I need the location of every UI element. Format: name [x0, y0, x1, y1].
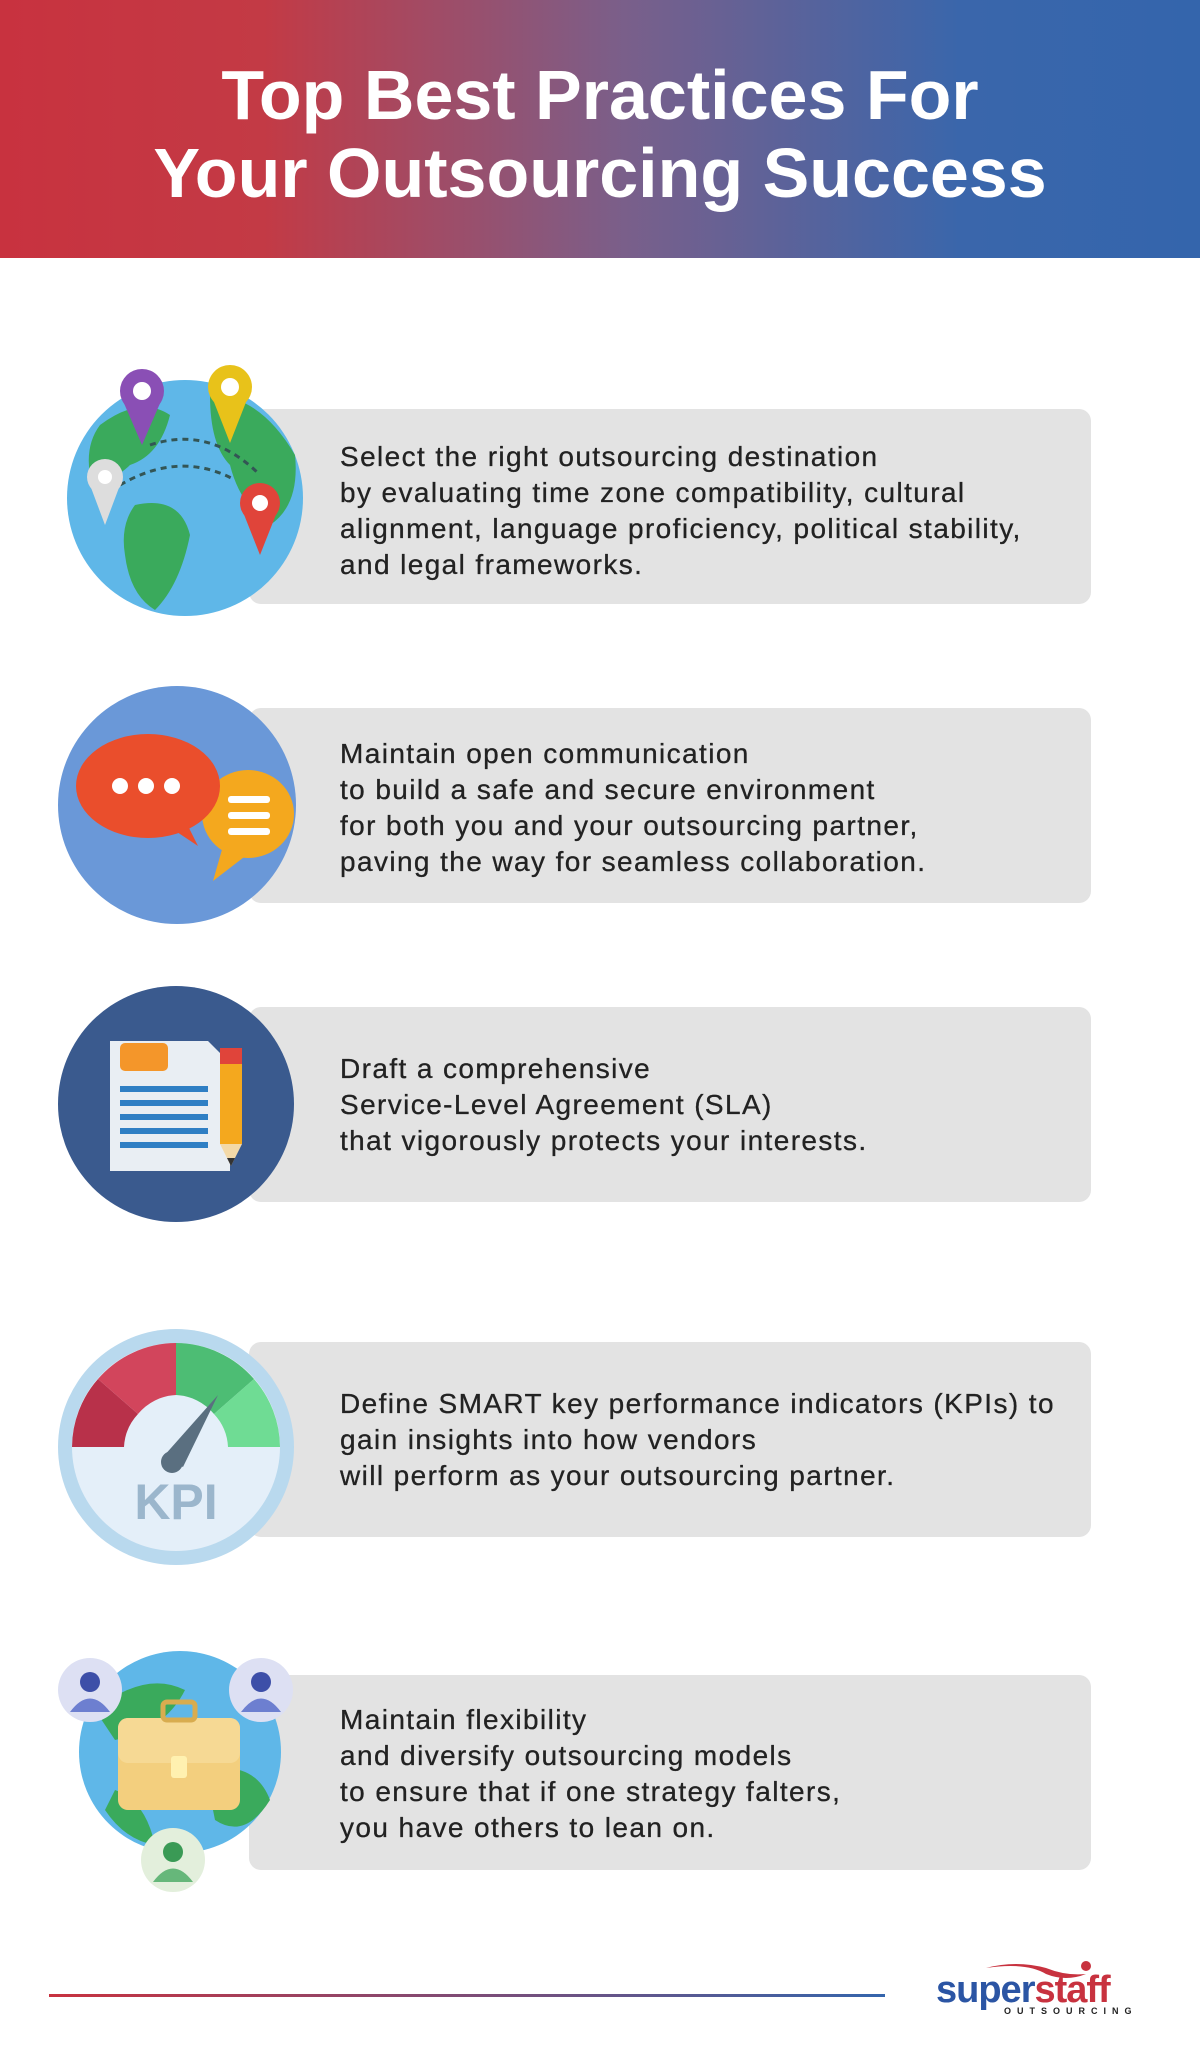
text 1: and legal frameworks. [340, 549, 643, 580]
text 2: Maintain open communication [340, 738, 750, 769]
icon: KPI gauge: KPI [134, 1474, 218, 1530]
logo: superstaff: OUTSOURCING [1004, 2006, 1138, 2016]
title [153, 56, 1047, 212]
text 2: paving the way for seamless collaboration. [340, 846, 926, 877]
text 4: will perform as your outsourcing partner. [340, 1460, 895, 1491]
text 1: by evaluating time zone compatibility, cultural [340, 477, 966, 508]
text 2: to build a safe and secure environment [340, 774, 876, 805]
text 5: to ensure that if one strategy falters, [340, 1776, 841, 1807]
text 1: Select the right outsourcing destination [340, 441, 879, 472]
icon: chat bubbles [58, 686, 296, 924]
text 4: Define SMART key performance indicators (KPIs) to [340, 1388, 1055, 1419]
logo: superstaff: superstaff [936, 1969, 1110, 2011]
panel 1 [249, 409, 1091, 604]
text 5: you have others to lean on. [340, 1812, 716, 1843]
icon: document and pencil [58, 986, 294, 1222]
text 2 [340, 738, 926, 878]
text 3: that vigorously protects your interests. [340, 1125, 868, 1156]
panel 3 [249, 1007, 1091, 1202]
text 5: and diversify outsourcing models [340, 1740, 793, 1771]
panel 5 [249, 1675, 1091, 1870]
icon: globe with briefcase and people [58, 1651, 293, 1892]
text 3: Service-Level Agreement (SLA) [340, 1089, 773, 1120]
title: Your Outsourcing Success [153, 134, 1047, 212]
title: Top Best Practices For [221, 56, 979, 134]
logo: superstaff [936, 1961, 1138, 2016]
text 4 [340, 1388, 1055, 1492]
text 3: Draft a comprehensive [340, 1053, 651, 1084]
text 4: gain insights into how vendors [340, 1424, 757, 1455]
text 5: Maintain flexibility [340, 1704, 587, 1735]
text 5 [340, 1704, 841, 1844]
icon: globe with pins [67, 365, 303, 616]
text 3 [340, 1053, 868, 1156]
text 2: for both you and your outsourcing partner, [340, 810, 919, 841]
icon: KPI gauge [58, 1329, 294, 1565]
panel 2 [249, 708, 1091, 903]
footer line [49, 1994, 885, 1997]
header banner [0, 0, 1200, 258]
panel 4 [249, 1342, 1091, 1537]
text 1 [340, 441, 1022, 580]
text 1: alignment, language proficiency, political stability, [340, 513, 1022, 544]
